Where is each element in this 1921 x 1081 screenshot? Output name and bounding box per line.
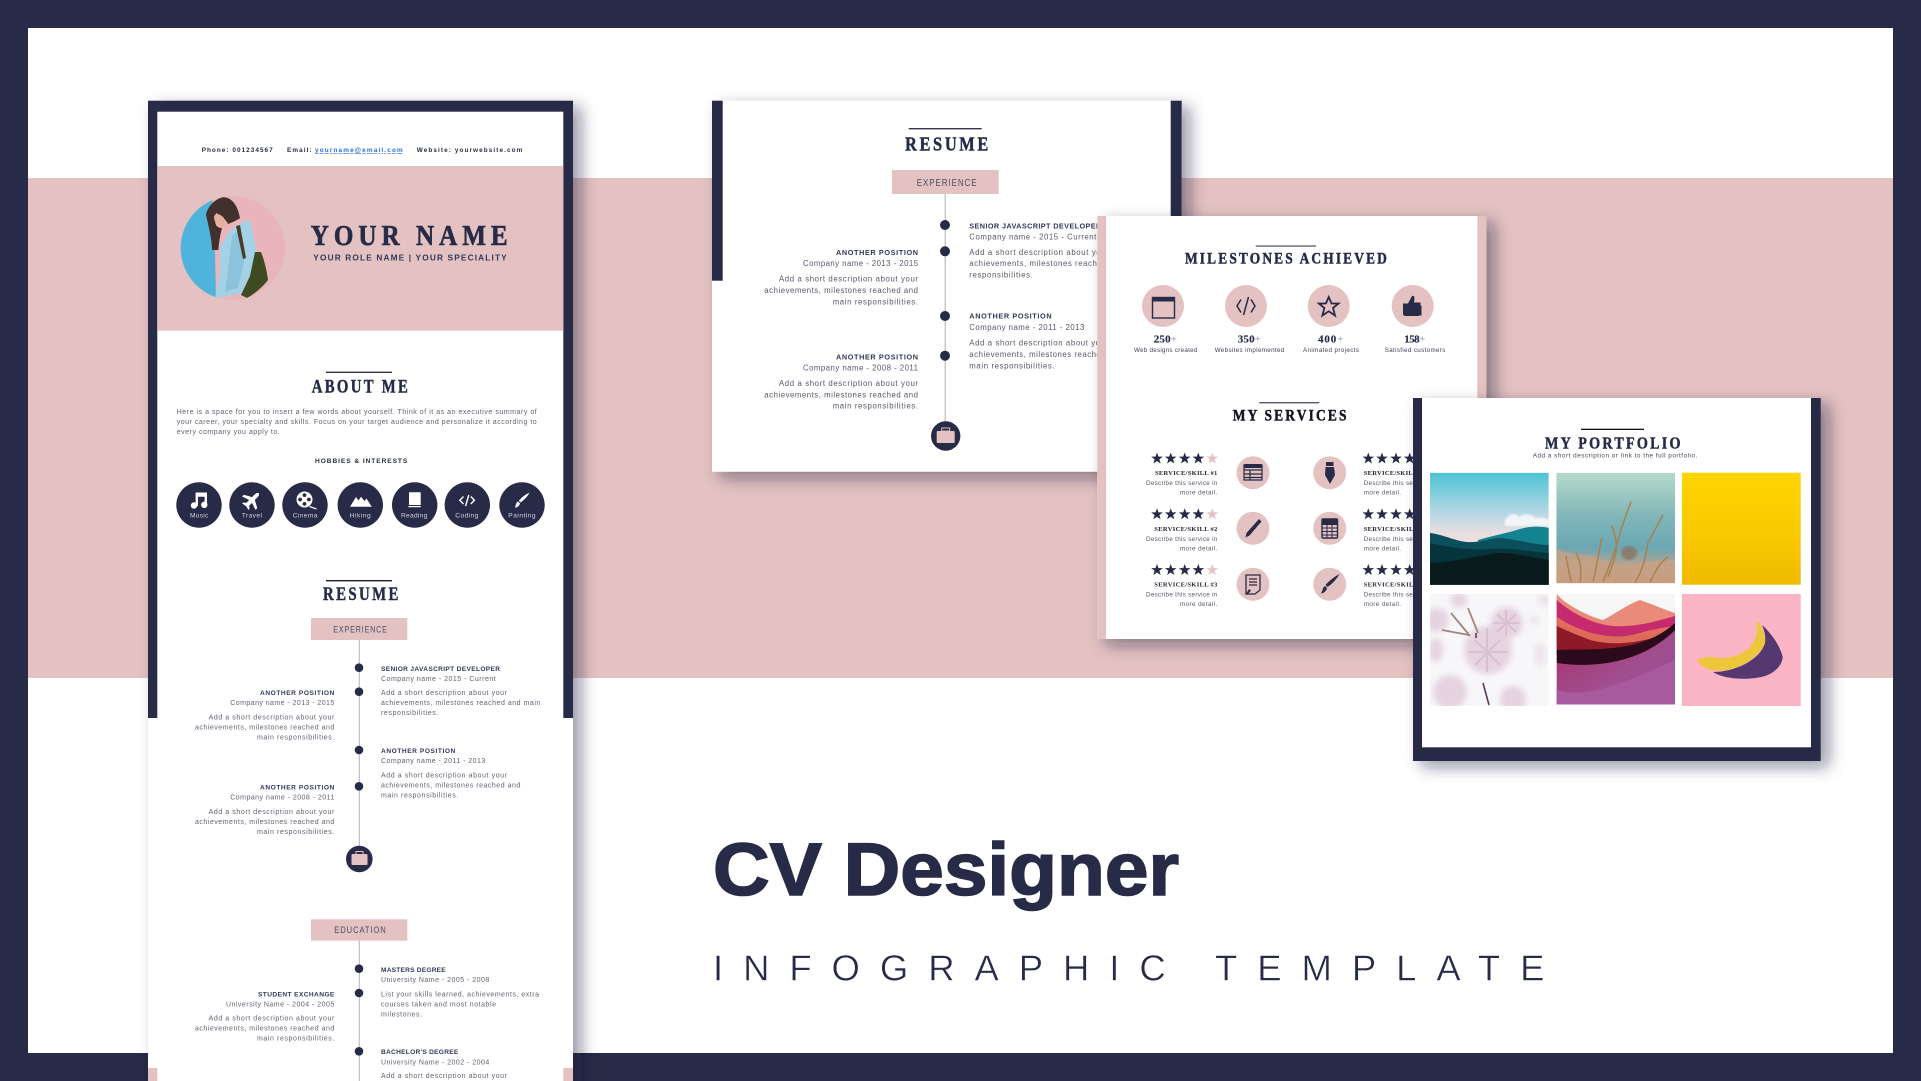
entry: position 2008: achievements, milestones reached and (764, 390, 918, 399)
entry: position 2008: Add a short description about your (209, 809, 335, 816)
role: YOUR ROLE NAME | YOUR SPECIALITY (313, 252, 507, 262)
entry: position 2011: Company name - 2011 - 2013 (969, 323, 1084, 332)
image: grass (1556, 473, 1675, 584)
entry: student exchange (195, 991, 335, 1042)
icon: music (176, 482, 222, 528)
experience timeline (195, 640, 540, 872)
entry: position 2011: achievements, milestones reached and (381, 782, 520, 789)
entry: position 2008 (764, 352, 918, 411)
entry: bachelors: Add a short description about your (381, 1073, 508, 1080)
tag: experience (311, 618, 407, 640)
about text: Here is a space for you to insert a few words about yourself. Think of it as an executive summary of (177, 409, 537, 416)
entry: position 2008: Company name - 2008 - 2011 (230, 795, 334, 802)
milestone: animated: 400+ (1318, 333, 1343, 345)
entry: student exchange: achievements, milestones reached and (195, 1025, 334, 1032)
entry: position 2013 (195, 690, 335, 741)
tag: experience: EXPERIENCE (333, 624, 388, 634)
entry: masters: MASTERS DEGREE (381, 967, 446, 974)
heading: services: MY SERVICES (1233, 408, 1349, 425)
tag: experience: EXPERIENCE (917, 178, 978, 189)
entry: senior developer: Company name - 2015 - Current (969, 233, 1097, 242)
milestone: customers (1385, 285, 1445, 354)
milestone: websites (1215, 285, 1285, 354)
entry: position 2011: main responsibilities. (381, 792, 458, 799)
entry: position 2013: main responsibilities. (833, 297, 918, 306)
entry: position 2008: ANOTHER POSITION (260, 785, 335, 792)
entry: student exchange: main responsibilities. (257, 1035, 334, 1042)
milestone: animated: Animated projects (1303, 347, 1359, 354)
contact line: Website: yourwebsite.com (417, 147, 523, 154)
service 4: more detail. (1364, 489, 1401, 496)
image: canyon (1556, 594, 1675, 705)
entry: masters: List your skills learned, achievements, extra (381, 991, 539, 998)
milestone: customers: 158+ (1404, 333, 1425, 345)
profile photo (180, 195, 286, 301)
entry: position 2011 (381, 748, 520, 799)
milestone: web designs (1134, 285, 1198, 354)
entry: position 2013: ANOTHER POSITION (260, 690, 335, 697)
entry: position 2008: Company name - 2008 - 2011 (803, 364, 918, 373)
tag: education: EDUCATION (334, 925, 387, 935)
service 3: SERVICE/SKILL #3 (1154, 582, 1218, 589)
entry: masters: courses taken and most notable (381, 1001, 496, 1008)
entry: position 2008: ANOTHER POSITION (836, 352, 918, 361)
entry: position 2013: achievements, milestones reached and (764, 286, 918, 295)
panel: milestones and services page (1097, 216, 1486, 639)
service 2: more detail. (1180, 545, 1218, 552)
entry: position 2008: Add a short description about your (779, 379, 918, 388)
image: banana (1682, 594, 1801, 706)
icon: briefcase (931, 421, 960, 451)
entry: senior developer: SENIOR JAVASCRIPT DEVELOPER (381, 666, 500, 673)
milestone: animated (1303, 285, 1359, 354)
service 2: SERVICE/SKILL #2 (1154, 526, 1218, 533)
about text: your career, your specialty and skills. Focus on your target audience and personalize it according to (177, 419, 537, 426)
image: blossom (1430, 594, 1548, 706)
icon: reading (392, 482, 437, 528)
entry: senior developer: Company name - 2015 - Current (381, 676, 496, 683)
entry: position 2011: Add a short description about your (381, 772, 508, 779)
timeline (764, 194, 1146, 451)
service 6: more detail. (1364, 601, 1401, 608)
header band (157, 166, 563, 331)
heading: services (1233, 402, 1349, 425)
hobbies heading: HOBBIES & INTERESTS (315, 458, 408, 465)
entry: position 2011: Company name - 2011 - 2013 (381, 758, 485, 765)
entry: position 2011 (969, 312, 1123, 370)
service 1 (1146, 452, 1270, 496)
contact line: Email: (287, 147, 312, 154)
milestone: customers: Satisfied customers (1385, 347, 1445, 354)
service 2 (1146, 508, 1270, 552)
icon: cinema: Cinema (293, 513, 318, 520)
entry: position 2013: Add a short description about your (779, 275, 918, 284)
entry: senior developer: responsibilities. (969, 270, 1033, 279)
education timeline (195, 941, 539, 1081)
entry: position 2008: achievements, milestones reached and (195, 819, 334, 826)
subtitle: INFOGRAPHIC TEMPLATE (713, 948, 1544, 989)
entry: position 2013: Company name - 2013 - 2015 (230, 700, 334, 707)
portfolio subtitle: Add a short description or link to the full portfolio. (1533, 453, 1698, 460)
heading: resume (905, 128, 991, 155)
title: CV Designer (713, 828, 1179, 911)
entry: position 2008 (195, 785, 335, 836)
image: yellow (1682, 473, 1801, 585)
entry: senior developer (381, 666, 540, 717)
entry: position 2011: ANOTHER POSITION (381, 748, 456, 755)
entry: masters: University Name - 2005 - 2008 (381, 977, 489, 984)
entry: senior developer (969, 221, 1146, 279)
panel: resume page (712, 101, 1182, 472)
service 1: SERVICE/SKILL #1 (1155, 470, 1217, 477)
service 2: Describe this service in (1146, 536, 1218, 543)
entry: masters: milestones. (381, 1012, 422, 1019)
service 5 (1313, 508, 1435, 552)
icon: travel: Travel (242, 513, 263, 520)
heading: portfolio: MY PORTFOLIO (1545, 433, 1683, 452)
heading: about me: ABOUT ME (312, 378, 410, 398)
entry: position 2013: main responsibilities. (257, 734, 334, 741)
entry: bachelors (381, 1049, 508, 1080)
service 5: more detail. (1364, 545, 1401, 552)
entry: student exchange: University Name - 2004 - 2005 (226, 1001, 334, 1008)
icon: music: Music (190, 513, 209, 520)
icon: coding: Coding (455, 513, 479, 520)
icon: painting: Painting (508, 513, 536, 520)
entry: senior developer: Add a short description about your (381, 690, 508, 697)
entry: position 2011: main responsibilities. (969, 361, 1055, 370)
entry: position 2013: Company name - 2013 - 2015 (803, 259, 919, 268)
entry: position 2011: ANOTHER POSITION (969, 312, 1052, 321)
contact line: Phone: 001234567 (202, 147, 273, 154)
hobby icons (176, 482, 545, 528)
icon: cinema (282, 482, 328, 528)
service 3: Describe this service in (1146, 592, 1218, 599)
service 1: more detail. (1180, 489, 1218, 496)
service 3 (1146, 564, 1270, 608)
service 3: more detail. (1180, 601, 1218, 608)
icon: coding (445, 482, 490, 528)
name: YOUR NAME (311, 221, 513, 252)
entry: position 2011: Add a short description about your (969, 339, 1109, 348)
tag: experience (892, 170, 999, 194)
panel: main CV page (148, 101, 573, 1081)
image: mountains (1430, 473, 1549, 585)
entry: senior developer: Add a short description about your (969, 248, 1109, 257)
service 6: Describe this service in (1364, 592, 1435, 599)
heading: milestones: MILESTONES ACHIEVED (1185, 251, 1389, 268)
icon: reading: Reading (401, 513, 428, 520)
entry: senior developer: achievements, milestones reached and main (381, 700, 540, 707)
milestone: web designs: 250+ (1154, 333, 1177, 345)
milestone: web designs: Web designs created (1134, 347, 1198, 354)
service 4: SERVICE/SKILL #4 (1364, 470, 1427, 477)
entry: position 2013: Add a short description about your (209, 714, 335, 721)
icon: briefcase (346, 846, 373, 872)
entry: position 2008: main responsibilities. (257, 829, 334, 836)
panel: portfolio page (1413, 398, 1821, 761)
icon: painting (499, 482, 545, 528)
heading: resume: RESUME (905, 133, 991, 155)
heading: about me (312, 372, 410, 398)
milestone: websites: 350+ (1238, 333, 1261, 345)
entry: bachelors: University Name - 2002 - 2004 (381, 1059, 489, 1066)
entry: masters (381, 967, 539, 1019)
entry: senior developer: responsibilities. (381, 710, 438, 717)
entry: position 2013: achievements, milestones reached and (195, 724, 334, 731)
service 6: SERVICE/SKILL #6 (1364, 582, 1427, 589)
service 1: Describe this service in (1146, 480, 1218, 487)
entry: senior developer: SENIOR JAVASCRIPT DEVELOPER (969, 221, 1102, 230)
icon: hiking (338, 482, 383, 528)
entry: student exchange: Add a short description about your (209, 1015, 335, 1022)
entry: position 2008: main responsibilities. (833, 402, 918, 411)
entry: position 2013 (764, 248, 919, 306)
heading: resume: RESUME (323, 585, 401, 605)
entry: bachelors: BACHELOR'S DEGREE (381, 1049, 459, 1056)
entry: senior developer: achievements, milestones reached and main (969, 259, 1146, 268)
service 6 (1313, 564, 1435, 608)
entry: position 2011: achievements, milestones reached and (969, 350, 1123, 359)
about text: every company you apply to. (177, 429, 280, 436)
milestone: websites: Websites implemented (1215, 347, 1285, 354)
service 5: Describe this service in (1364, 536, 1435, 543)
service 5: SERVICE/SKILL #5 (1364, 526, 1427, 533)
service 4: Describe this service in (1364, 480, 1435, 487)
service 4 (1313, 452, 1435, 496)
heading: resume (323, 580, 401, 605)
about text (177, 409, 537, 436)
icon: hiking: Hiking (350, 513, 371, 520)
entry: student exchange: STUDENT EXCHANGE (258, 991, 335, 998)
tag: education (311, 919, 407, 941)
entry: position 2013: ANOTHER POSITION (836, 248, 918, 257)
contact line: yourname@email.com (315, 147, 403, 154)
icon: travel (229, 482, 275, 528)
contact line (202, 147, 523, 154)
